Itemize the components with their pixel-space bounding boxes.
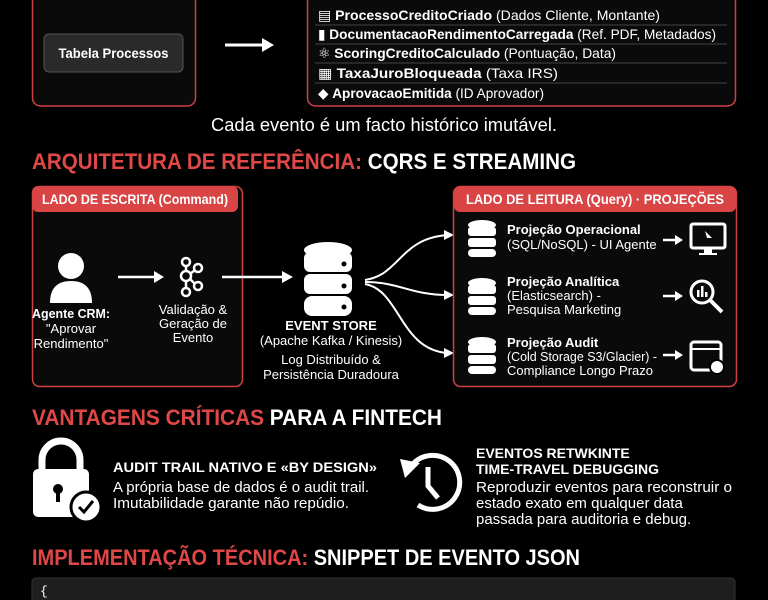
text: agente: "Aprovar [46, 321, 97, 336]
text: event store: Log Distribuído & [281, 352, 381, 367]
row: operacional: (SQL/NoSQL) - UI Agente [507, 237, 657, 252]
icon: kafka [181, 258, 202, 296]
panel: write side [32, 186, 242, 386]
text: time travel: Reproduzir eventos para reconstruir o [476, 479, 732, 496]
panel: event list: ▦ TaxaJuroBloqueada (Taxa IRS) [318, 65, 558, 81]
arrow: to event store [222, 271, 293, 283]
panel: event list: ▤ ProcessoCreditoCriado (Dados Cliente, Montante) [318, 7, 660, 23]
text: time travel: passada para auditoria e debug. [476, 511, 691, 528]
text: validacao: Evento [173, 330, 213, 345]
row: audit: Compliance Longo Prazo [507, 363, 653, 378]
header: read side: LADO DE LEITURA (Query) · PROJEÇÕES [466, 190, 724, 207]
arrow [118, 271, 164, 283]
panel: event list: ▮ DocumentacaoRendimentoCarregada (Ref. PDF, Metadados) [318, 26, 716, 42]
text: audit trail: A própria base de dados é o audit trail. [113, 479, 369, 496]
row: analitica: (Elasticsearch) - [507, 288, 601, 303]
panel: event list: ⚛ ScoringCreditoCalculado (Pontuação, Data) [318, 45, 616, 61]
arrow: table to events [225, 38, 274, 52]
heading: implementacao: IMPLEMENTAÇÃO TÉCNICA: SNIPPET DE EVENTO JSON [32, 545, 580, 570]
row: analitica: Projeção Analítica [507, 274, 620, 289]
text: audit trail: Imutabilidade garante não repúdio. [113, 495, 349, 512]
arrows: fan-out curves [365, 235, 448, 353]
panel: event list: ◆ AprovacaoEmitida (ID Aprovador) [318, 85, 544, 101]
header: write side [32, 186, 238, 212]
text: event store: EVENT STORE [285, 318, 377, 333]
button: tabela processos [44, 34, 183, 72]
text: time travel: TIME-TRAVEL DEBUGGING [476, 461, 659, 477]
row: operacional [468, 220, 725, 257]
icon: lock with check [33, 441, 101, 522]
caption: immutable fact: Cada evento é um facto histórico imutável. [211, 115, 557, 135]
row: audit: (Cold Storage S3/Glacier) - [507, 349, 657, 364]
row: audit: Projeção Audit [507, 335, 599, 350]
text: audit trail: AUDIT TRAIL NATIVO E «BY DESIGN» [113, 459, 377, 475]
text: validacao: Validação & [159, 302, 227, 317]
row: analitica: Pesquisa Marketing [507, 302, 621, 317]
icon: person [50, 253, 92, 303]
text: validacao: Geração de [159, 316, 227, 331]
heading: arquitetura: ARQUITETURA DE REFERÊNCIA: CQRS E STREAMING [32, 149, 576, 174]
text: event store: (Apache Kafka / Kinesis) [260, 333, 402, 348]
text: agente: Rendimento" [34, 336, 109, 351]
row: analitica [468, 274, 722, 317]
header: read side [454, 186, 736, 212]
button: tabela processos: Tabela Processos [58, 45, 169, 61]
code block: { [40, 584, 48, 599]
panel: tabela processos [32, 0, 196, 106]
heading: vantagens: VANTAGENS CRÍTICAS PARA A FINTECH [32, 405, 442, 430]
row: operacional: Projeção Operacional [507, 222, 641, 237]
icon: clock rewind [400, 455, 460, 509]
header: write side: LADO DE ESCRITA (Command) [42, 191, 228, 207]
text: event store: Persistência Duradoura [263, 367, 400, 382]
text: agente: Agente CRM: [32, 306, 110, 321]
text: time travel: EVENTOS RETWKINTE [476, 445, 630, 461]
code block [32, 578, 735, 600]
icon: event store database [304, 242, 352, 316]
panel: event list [308, 0, 736, 106]
text: time travel: estado exato em qualquer data [476, 495, 683, 512]
row: audit [468, 335, 724, 378]
panel: read side [454, 186, 736, 386]
